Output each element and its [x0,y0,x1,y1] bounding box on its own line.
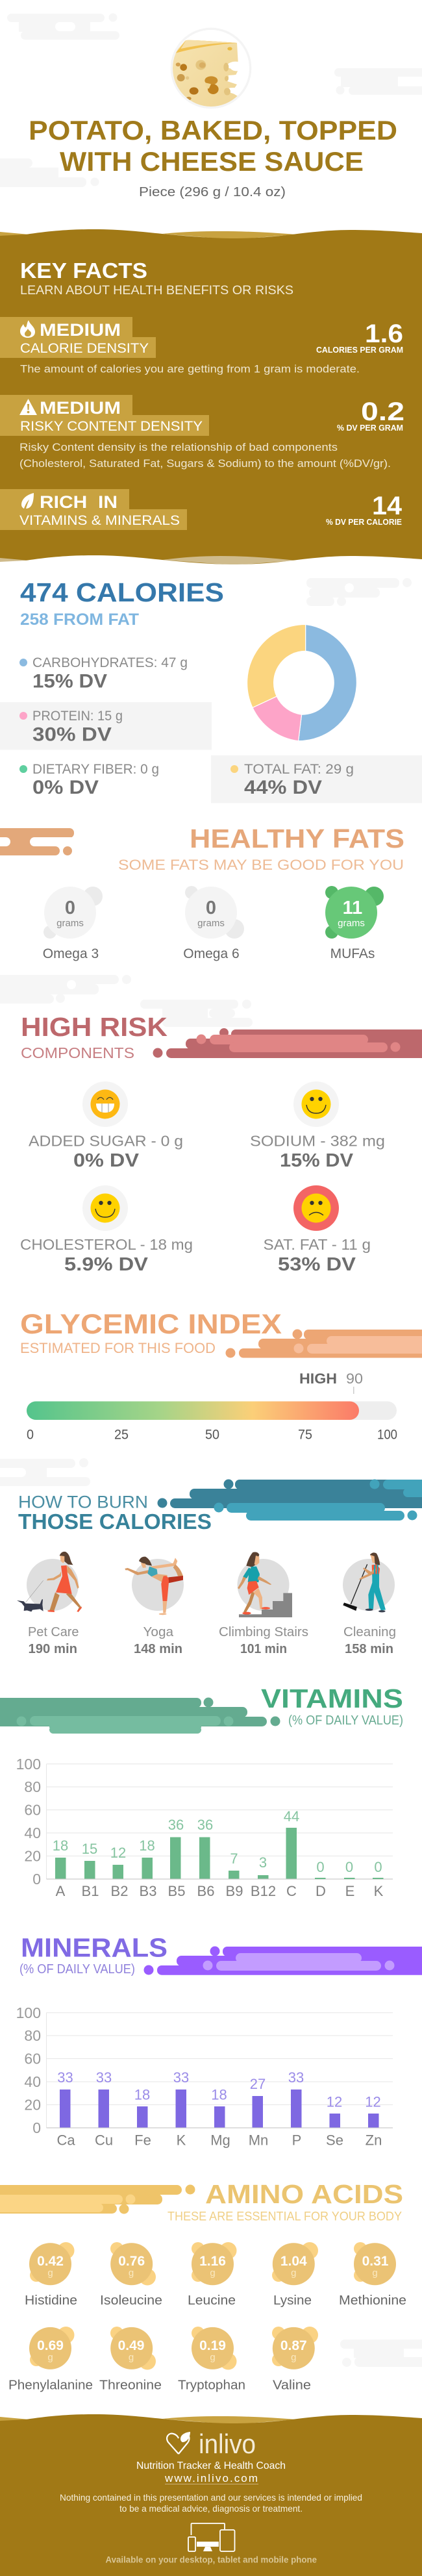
legend: carbohydrates [19,655,188,692]
bar chart: minerals: 0 [32,2119,41,2136]
bar chart: vitamins: B3 [140,1883,156,1899]
subheading: (% OF DAILY VALUE) [19,1962,135,1976]
bar chart: minerals: 100 [16,2004,41,2021]
stat: MUFAs [325,886,384,961]
bar chart: vitamins: 3 [259,1854,267,1871]
fact: risky content density: 0.2 [361,398,404,426]
amino acid bubbles row 2: 0.69 [37,2338,64,2353]
decorative band [226,1329,422,1357]
amino acid bubbles row 1: 0.31 [362,2254,389,2269]
activity: climbing stairs [238,1552,292,1617]
amino acid bubbles row 2: g [47,2352,53,2363]
fact: risky content density: % DV PER GRAM [337,423,403,433]
fact: rich in vitamins and minerals: VITAMINS & MINERALS [19,513,180,528]
donut chart [247,624,356,741]
bar chart: vitamins: D [316,1883,326,1899]
amino acid bubbles row 2: 0.87 [280,2338,307,2353]
amino acid bubbles row 2 [8,2327,318,2393]
component: sodium: 15% DV [280,1150,354,1171]
stat: omega 3 [43,887,103,961]
background cloud [340,2340,422,2367]
gauge axis [27,1428,397,1442]
background cloud: left of title [0,158,99,187]
decorative band [153,1028,422,1058]
gauge bar [27,1402,397,1420]
bar chart: minerals: Se [326,2132,343,2149]
bar chart: vitamins: 0 [32,1871,41,1888]
activity labels: 101 min [240,1642,287,1656]
bar chart: vitamins: A [56,1883,66,1899]
bar chart: vitamins: E [345,1883,354,1899]
subheading: THESE ARE ESSENTIAL FOR YOUR BODY [168,2210,402,2224]
component: added sugar: 0% DV [73,1150,140,1171]
bar chart: minerals: Mn [249,2132,268,2149]
bar chart: vitamins: 44 [284,1808,299,1825]
title [29,115,397,177]
legend: carbohydrates: 15% DV [32,670,107,692]
panel: vitamins [0,1684,403,1899]
legend: total fat: TOTAL FAT: 29 g [244,762,354,777]
disclaimer: Nothing contained in this presentation and our services is intended or implied [60,2492,362,2503]
bar chart: vitamins: B9 [226,1883,243,1899]
bar chart: minerals: Mg [210,2132,230,2149]
stat: MUFAs: 11 [343,898,362,918]
stat: omega 6: 0 [206,898,216,918]
stat: omega 6: grams [197,918,225,929]
panel: glycemic index [20,1309,422,1442]
decorative band [157,1480,422,1521]
bar chart: minerals: 12 [365,2094,381,2110]
bar chart: vitamins: B6 [197,1883,214,1899]
fact: calorie density: The amount of calories you are getting from 1 gram is moderate. [20,362,360,375]
fact: rich in vitamins and minerals: % DV PER CALORIE [326,517,402,527]
stat: MUFAs: grams [338,918,365,929]
amino acid bubbles row 1: g [291,2267,296,2279]
panel: healthy fats [0,824,404,961]
amino acid bubbles row 1: Isoleucine [100,2293,162,2308]
food image: cheese [171,28,251,112]
gauge label [299,1370,363,1394]
amino acid bubbles row 2: Tryptophan [178,2379,245,2393]
gauge axis: 0 [27,1428,34,1442]
bar chart: vitamins: 12 [110,1845,126,1861]
fact: calorie density: CALORIE DENSITY [20,341,149,356]
panel: calories [0,577,422,803]
decorative band [0,1698,280,1734]
component: cholesterol: CHOLESTEROL - 18 mg [20,1236,193,1253]
background cloud [0,1458,90,1486]
gauge axis: 100 [377,1428,397,1442]
bar chart: vitamins: 0 [374,1859,382,1875]
legend: protein: PROTEIN: 15 g [32,709,123,724]
website link: www.inlivo.com [164,2472,258,2484]
bar chart: vitamins: B12 [251,1883,276,1899]
heading: 474 calories: 474 CALORIES [20,577,224,607]
activity labels: Yoga [143,1625,174,1639]
activity labels: 190 min [29,1642,77,1656]
bar chart: vitamins: 80 [24,1778,41,1795]
bar chart: vitamins: B1 [82,1883,99,1899]
activity: pet care [17,1552,82,1612]
bar chart: vitamins: K [374,1883,384,1899]
legend: protein [0,702,212,750]
gauge label: HIGH [299,1370,337,1387]
disclaimer: to be a medical advice, diagnosis or treatment. [119,2503,303,2514]
heading: minerals: MINERALS [21,1933,168,1963]
amino acid bubbles row 1: g [47,2267,53,2279]
availability note: Available on your desktop, tablet and mobile phone [105,2554,317,2564]
background cloud: top right [334,68,422,95]
tagline: Nutrition Tracker & Health Coach [136,2460,286,2471]
bar chart: vitamins: 100 [16,1756,41,1773]
bar chart: minerals: K [177,2132,186,2149]
logo: inlivo [167,2429,256,2459]
panel: minerals [16,1933,422,2149]
stat: MUFAs: MUFAs [330,946,375,961]
gauge label: 90 [346,1370,363,1387]
stat: omega 3: grams [56,918,84,929]
bar chart: minerals: Fe [134,2132,151,2149]
amino acid bubbles row 2: g [210,2352,216,2363]
fact: rich in vitamins and minerals: RICH IN [40,492,118,512]
panel: key facts [0,229,422,572]
stat: omega 3: Omega 3 [43,946,99,961]
gauge axis: 75 [298,1428,312,1442]
amino acid bubbles row 1: 1.04 [280,2254,307,2269]
amino acid bubbles row 1: g [129,2267,134,2279]
activity: yoga [125,1557,184,1615]
fact: calorie density: CALORIES PER GRAM [316,345,403,355]
background cloud [306,578,412,606]
legend: total fat [211,755,422,803]
amino acid bubbles row 1: Methionine [339,2293,406,2308]
amino acid bubbles row 1: 0.42 [37,2254,64,2269]
bar chart: vitamins [16,1756,393,1899]
bar chart: minerals: 18 [134,2086,150,2103]
heading: vitamins: VITAMINS [261,1684,403,1713]
bar chart: minerals: 27 [250,2076,266,2092]
amino acid bubbles row 2: Phenylalanine [8,2379,93,2393]
amino acid bubbles row 1: g [372,2267,378,2279]
subheading: ESTIMATED FOR THIS FOOD [20,1340,216,1356]
subheading: components: COMPONENTS [21,1044,134,1061]
bar chart: vitamins: 0 [345,1859,353,1875]
background cloud: top left [7,13,119,40]
fact: risky content density: Risky Content density is the relationship of bad components [19,441,338,453]
disclaimer [60,2492,362,2514]
subheading: from fat: 258 FROM FAT [20,611,139,629]
serving size: Piece (296 g / 10.4 oz) [139,185,286,199]
title: POTATO, BAKED, TOPPED [29,115,397,145]
bar chart: minerals: 40 [24,2073,41,2090]
bar chart: minerals: 33 [57,2069,73,2086]
gauge axis: 50 [205,1428,219,1442]
legend: dietary fiber: 0% DV [32,777,99,798]
amino acid bubbles row 2: 0.49 [118,2338,144,2353]
component: sodium: SODIUM - 382 mg [250,1133,385,1150]
bar chart: vitamins: 15 [82,1841,97,1857]
bar chart: minerals: Cu [95,2132,113,2149]
activity labels: 158 min [345,1642,393,1656]
panel: how to burn calories [0,1458,422,1656]
legend: dietary fiber: DIETARY FIBER: 0 g [32,762,159,777]
activity labels: Climbing Stairs [219,1625,308,1639]
heading: healthy fats: HEALTHY FATS [190,824,404,853]
fact: rich in vitamins and minerals: 14 [372,492,403,520]
heading: high risk: HIGH RISK [21,1012,168,1042]
fact: risky content density: MEDIUM [40,398,121,418]
component: added sugar: ADDED SUGAR - 0 g [29,1133,183,1150]
gauge axis: 25 [114,1428,129,1442]
icon: leaf [21,493,34,509]
activity labels: Cleaning [343,1625,396,1639]
component: added sugar [29,1081,183,1171]
stat: omega 3: 0 [65,898,75,918]
bar chart: minerals: P [292,2132,301,2149]
bar chart: vitamins: 36 [197,1817,213,1833]
heading: amino acids: AMINO ACIDS [205,2179,403,2209]
fact: risky content density: (Cholesterol, Saturated Fat, Sugars & Sodium) to the amount (%DV/gr). [19,457,391,470]
icon: flame [20,320,35,338]
bar chart: vitamins: B2 [111,1883,128,1899]
icon: warning [19,399,37,415]
amino acid bubbles row 2: Valine [273,2379,311,2393]
bar chart: vitamins: 60 [24,1802,41,1819]
stat: omega 6: Omega 6 [183,946,240,961]
fact: risky content density: RISKY CONTENT DENSITY [20,419,203,434]
fact: calorie density: 1.6 [365,320,403,348]
amino acid bubbles row 1: 1.16 [199,2254,226,2269]
panel: footer [0,2414,422,2576]
bar chart: vitamins: B5 [168,1883,185,1899]
heading: how to burn: HOW TO BURN [18,1493,148,1512]
activity labels: Pet Care [28,1625,79,1639]
amino acid bubbles row 2: 0.19 [199,2338,226,2353]
component: saturated fat: 53% DV [278,1254,356,1275]
fact: calorie density: MEDIUM [40,320,121,340]
bar chart: minerals: 12 [327,2094,342,2110]
bar chart: minerals: 20 [24,2097,41,2114]
heading: those calories: THOSE CALORIES [18,1509,212,1534]
background cloud: middle [140,1000,253,1027]
panel: high risk components [20,1012,422,1275]
icon: devices [188,2523,235,2551]
stat: omega 6 [183,886,244,961]
bar chart: vitamins: C [286,1883,297,1899]
amino acid bubbles row 2: g [129,2352,134,2363]
amino acid bubbles row 1: Lysine [273,2293,312,2308]
component: saturated fat: SAT. FAT - 11 g [264,1236,371,1253]
amino acid bubbles row 2: g [291,2352,296,2363]
fact: risky content density [0,395,404,470]
subheading: LEARN ABOUT HEALTH BENEFITS OR RISKS [20,284,293,297]
bar chart: minerals: 33 [173,2069,189,2086]
decorative band [0,2185,195,2214]
decorative band [0,828,82,855]
amino acid bubbles row 1: g [210,2267,216,2279]
bar chart: vitamins: 0 [316,1859,325,1875]
legend: dietary fiber [19,762,159,798]
bar chart: minerals: 33 [96,2069,112,2086]
bar chart: vitamins: 40 [24,1825,41,1841]
legend: carbohydrates: CARBOHYDRATES: 47 g [32,655,188,670]
bar chart: vitamins: 18 [139,1837,155,1854]
subheading: (% OF DAILY VALUE) [288,1713,403,1728]
bar chart: minerals [16,2004,393,2149]
activity labels: 148 min [134,1642,182,1656]
bar chart: vitamins: 36 [168,1817,184,1833]
amino acid bubbles row 1 [25,2242,406,2308]
bar chart: minerals: 80 [24,2027,41,2044]
activity labels [28,1625,396,1656]
bar chart: vitamins: 20 [24,1847,41,1864]
amino acid bubbles row 1: Leucine [188,2293,236,2308]
subheading: SOME FATS MAY BE GOOD FOR YOU [118,857,404,873]
amino acid bubbles row 1: Histidine [25,2293,77,2308]
activity: cleaning [343,1552,395,1612]
fact: calorie density [0,317,403,375]
background cloud: middle left [0,975,131,1004]
component: cholesterol: 5.9% DV [64,1254,149,1275]
legend: protein: 30% DV [32,724,112,746]
component: sodium [250,1081,385,1171]
legend: total fat: 44% DV [244,777,322,798]
bar chart: minerals: 60 [24,2050,41,2067]
bar chart: minerals: Zn [366,2132,382,2149]
amino acid bubbles row 2: Threonine [99,2379,162,2393]
footer background wave [0,2414,422,2576]
bar chart: minerals: Ca [56,2132,75,2149]
component: cholesterol [20,1185,193,1275]
amino acid bubbles row 1: 0.76 [118,2254,145,2269]
heading: key facts: KEY FACTS [20,259,147,283]
title: WITH CHEESE SAUCE [60,146,364,177]
logo: inlivo: inlivo [199,2429,256,2459]
heading: glycemic index: GLYCEMIC INDEX [20,1309,282,1340]
bar chart: vitamins: 7 [230,1850,238,1867]
component: saturated fat [264,1185,371,1275]
panel: amino acids [0,2179,422,2393]
bar chart: vitamins: 18 [53,1837,68,1854]
bar chart: minerals: 33 [288,2069,304,2086]
decorative band [144,1946,422,1975]
key facts background wave [0,229,422,572]
fact: rich in vitamins and minerals [0,489,403,530]
bar chart: minerals: 18 [211,2086,227,2103]
